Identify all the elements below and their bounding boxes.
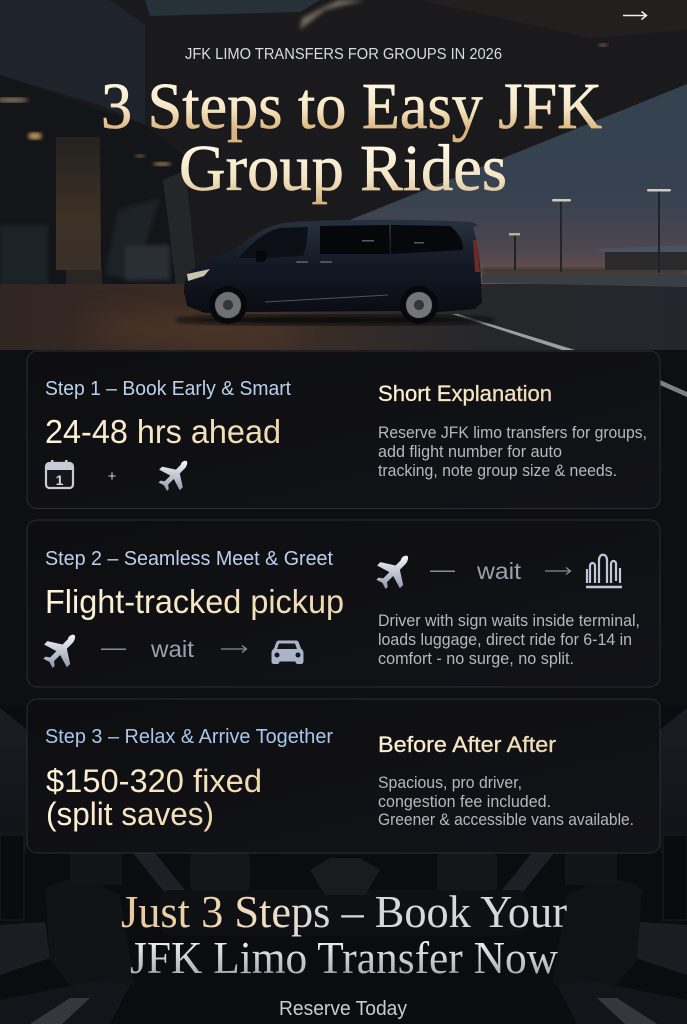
comparison text: congestion fee included. (378, 792, 551, 811)
explanation text: Reserve JFK limo transfers for groups, (378, 423, 647, 442)
road line continuing past card (660, 380, 687, 397)
step 2 text (378, 611, 640, 668)
ground (0, 284, 687, 350)
flow: plane to car: wait (150, 636, 195, 662)
title (101, 70, 602, 205)
background: airport hero scene (0, 0, 687, 350)
step 3 figure: $150-320 fixed (46, 763, 262, 799)
step 2 text: comfort - no surge, no split. (378, 649, 574, 668)
van (175, 220, 495, 325)
explanation text: tracking, note group size & needs. (378, 461, 617, 480)
icon: car (272, 640, 304, 664)
overpass underside (0, 0, 687, 282)
flow: plane to terminal (376, 555, 622, 589)
icon: plane (159, 461, 187, 491)
panel: step 1 (27, 351, 660, 508)
step 3 figure: (split saves) (46, 796, 214, 832)
panel: step 3 (27, 699, 660, 853)
closing headline: Just 3 Steps – Book Your (121, 886, 567, 937)
kicker: JFK LIMO TRANSFERS FOR GROUPS IN 2026 (185, 46, 502, 63)
background: van interior (0, 690, 687, 1024)
background: band behind cards (0, 350, 687, 706)
step 2 text: loads luggage, direct ride for 6-14 in (378, 630, 632, 649)
explanation heading: Short Explanation (378, 381, 552, 406)
icon: calendar (46, 460, 73, 488)
step 2 text: Driver with sign waits inside terminal, (378, 611, 640, 630)
flow: plane to car (43, 635, 303, 668)
plus sign: + (108, 468, 117, 485)
step 3 figure (46, 763, 262, 832)
step 1 figure: 24-48 hrs ahead (45, 413, 281, 450)
comparison text (378, 773, 634, 829)
comparison text: Spacious, pro driver, (378, 773, 522, 792)
title: Group Rides (179, 132, 507, 205)
title: 3 Steps to Easy JFK (101, 70, 602, 143)
explanation text (378, 423, 647, 480)
icon: calendar: 1 (56, 472, 64, 488)
step 2 heading: Step 2 – Seamless Meet & Greet (45, 548, 333, 570)
arrow: top right (623, 12, 646, 20)
step 3 heading: Step 3 – Relax & Arrive Together (45, 726, 333, 748)
panel: step 2 (27, 520, 660, 687)
explanation text: add flight number for auto (378, 442, 562, 461)
flow: plane to terminal: wait (476, 558, 522, 584)
closing headline (121, 886, 567, 983)
comparison heading: Before After After (378, 732, 556, 757)
step 1 heading: Step 1 – Book Early & Smart (45, 378, 291, 400)
closing headline: JFK Limo Transfer Now (130, 932, 559, 983)
call to action: Reserve Today (279, 998, 407, 1020)
terminal and lights (590, 245, 687, 252)
icon: terminal (586, 555, 622, 587)
columns (0, 225, 48, 285)
comparison text: Greener & accessible vans available. (378, 810, 634, 829)
sky (100, 60, 687, 285)
step 2 figure: Flight-tracked pickup (45, 583, 344, 620)
